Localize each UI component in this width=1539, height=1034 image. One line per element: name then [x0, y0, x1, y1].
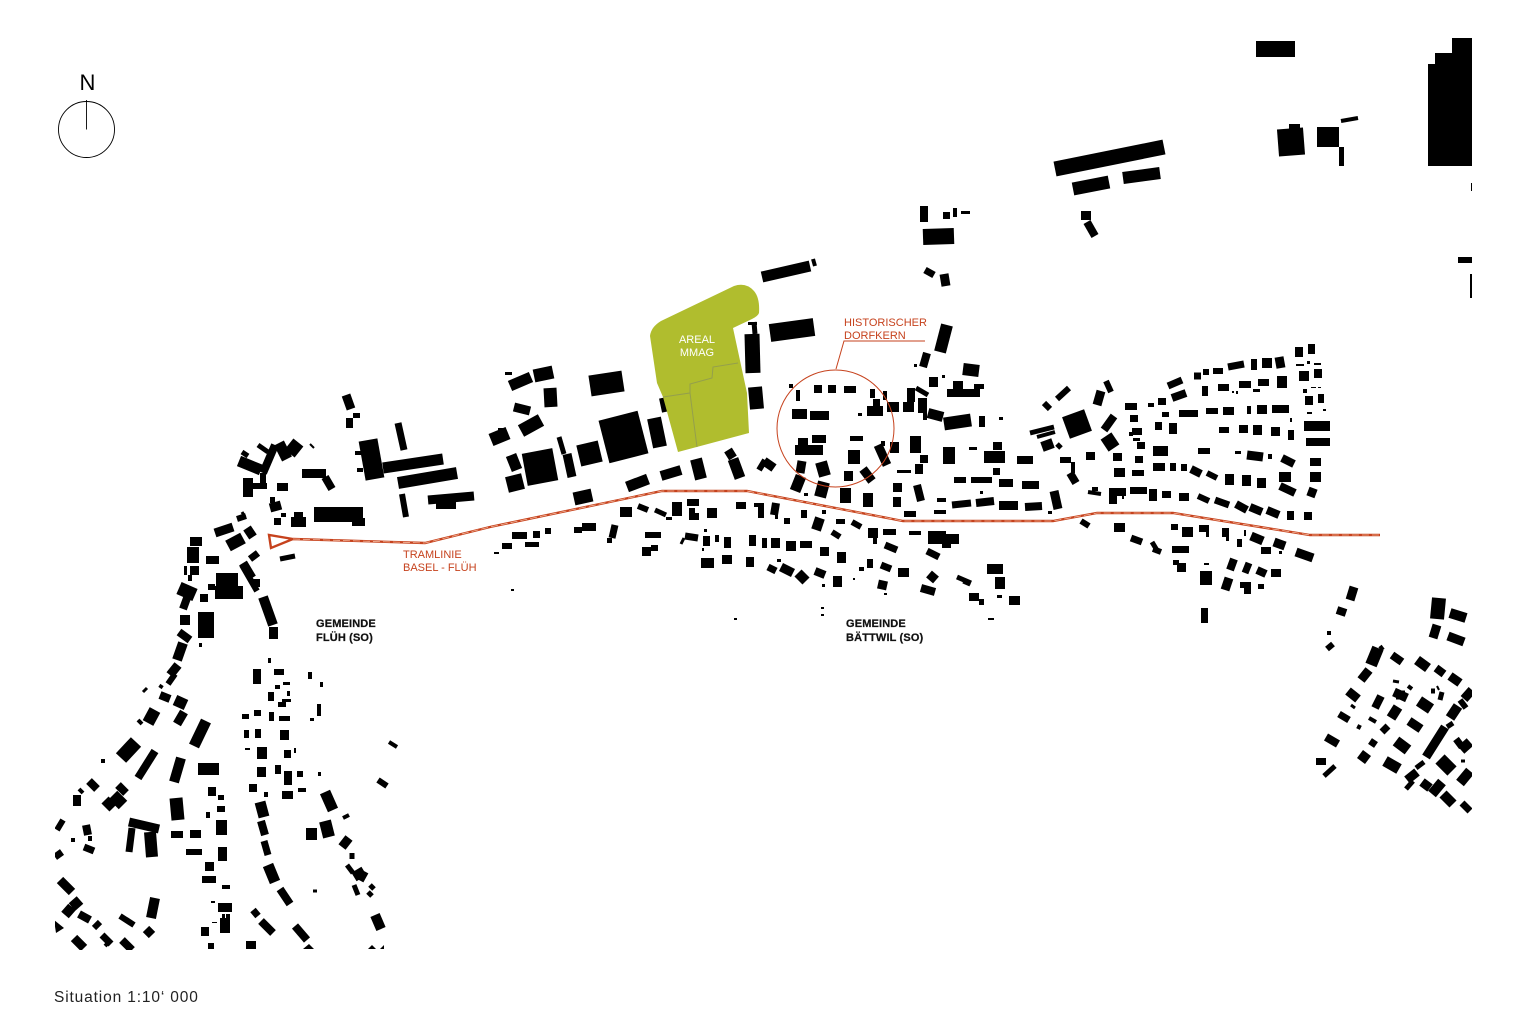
- buildings: industrial belt: [491, 259, 815, 499]
- icon: north arrow: [58, 70, 114, 158]
- label: Gemeinde Flüh: GEMEINDE: [316, 618, 376, 630]
- label: Tramlinie Basel - Flüh: BASEL - FLÜH: [403, 562, 477, 574]
- label: Gemeinde Bättwil: GEMEINDE: [846, 618, 906, 630]
- label: Historischer Dorfkern: HISTORISCHER: [844, 317, 927, 329]
- label: Gemeinde Flüh: FLÜH (SO): [316, 631, 373, 644]
- callout: historic village core: [777, 341, 925, 487]
- icon: north arrow: N: [80, 70, 95, 95]
- caption: scale: Situation 1:10‘ 000: [54, 989, 199, 1006]
- label: Areal MMAG: MMAG: [680, 347, 714, 359]
- buildings: south-west quarter: [54, 658, 397, 950]
- buildings: eastern quarter: [1030, 344, 1354, 623]
- label: Tramlinie Basel - Flüh: TRAMLINIE: [403, 549, 462, 561]
- buildings: Flüh settlement: [177, 395, 474, 660]
- buildings: north-east outliers: [920, 38, 1472, 352]
- tram line Basel-Flüh: [269, 491, 1380, 548]
- buildings: south-east quarter: [1316, 598, 1472, 811]
- site: Areal MMAG green area: [650, 285, 759, 452]
- label: Areal MMAG: AREAL: [679, 334, 715, 346]
- label: Historischer Dorfkern: DORFKERN: [844, 330, 906, 342]
- label: Gemeinde Bättwil: BÄTTWIL (SO): [846, 631, 924, 644]
- buildings: strip south of the tram line: [494, 499, 1020, 620]
- buildings: historic village core: [789, 353, 1058, 517]
